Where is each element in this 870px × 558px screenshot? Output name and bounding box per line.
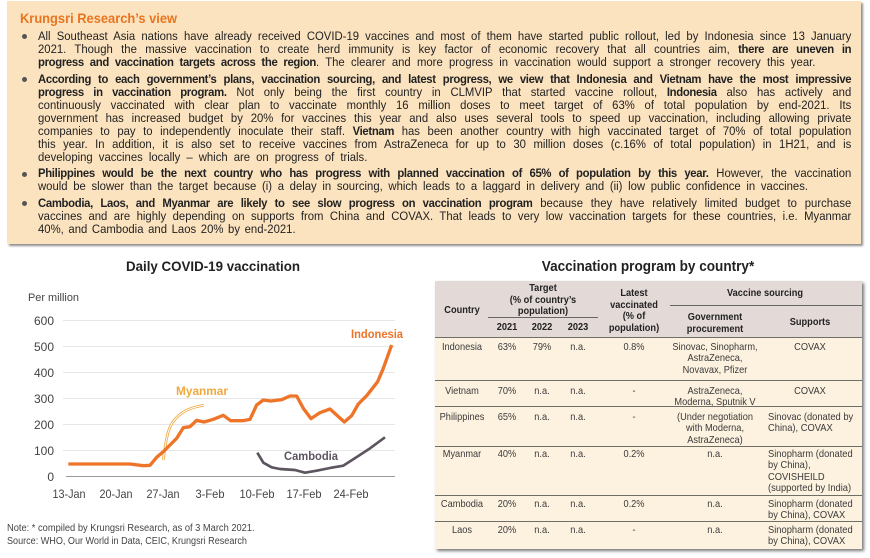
panel: Krungsri Research's view: [7, 1, 861, 244]
text block: bullet 2: government has increased budget by 20% for vaccines this year and also uses several tools to speed up vaccination, including allowing private: [38, 111, 851, 125]
line: Indonesia: [68, 345, 392, 466]
table header: population): [609, 322, 659, 334]
table header: (% of country’s: [510, 294, 576, 306]
row: Vietnam: AstraZeneca,: [688, 385, 742, 397]
chart title: Daily COVID-19 vaccination: [126, 258, 300, 274]
text block: bullet 3: [22, 166, 851, 193]
row: Cambodia: n.a.: [570, 498, 586, 510]
x axis labels: 24-Feb: [334, 487, 369, 501]
row: Philippines: n.a.: [534, 411, 550, 423]
row: Laos: Laos: [452, 524, 472, 536]
row: Philippines: China), COVAX: [768, 422, 833, 434]
y axis labels: 400: [34, 366, 54, 380]
x axis labels: 3-Feb: [196, 487, 225, 501]
row: Cambodia: by China), COVAX: [768, 509, 845, 521]
row: Cambodia: n.a.: [534, 498, 550, 510]
table header: (% of: [623, 310, 645, 322]
row: Cambodia: [435, 496, 862, 522]
table header: 2023: [568, 321, 588, 333]
row: Vietnam: n.a.: [534, 385, 550, 397]
row: Myanmar: 0.2%: [623, 448, 645, 460]
table header: vaccinated: [610, 299, 658, 311]
row: Myanmar: 40%: [498, 448, 516, 460]
y axis labels: 200: [34, 418, 54, 432]
row: Indonesia: [435, 338, 862, 381]
row: Vietnam: Moderna, Sputnik V: [674, 396, 756, 408]
row: Philippines: Philippines: [440, 411, 484, 423]
y axis labels: 300: [34, 392, 54, 406]
row: Indonesia: 79%: [533, 341, 551, 353]
x axis labels: 13-Jan: [52, 487, 86, 501]
x axis labels: 17-Feb: [286, 487, 322, 501]
text block: bullet 2: companies to pay to independently inoculate their staff. Vietnam has been another country with high vaccinated target of 70% of total population: [38, 124, 851, 138]
x axis labels: [52, 487, 369, 501]
heading: Krungsri Research's view: Krungsri Research’s view: [20, 10, 177, 26]
text block: bullet 2: continuously vaccinated with clear plan to vaccinate monthly 16 million doses to meet target of 63% of total population by end-2021. Its: [38, 98, 851, 112]
table: vaccination program by country: [435, 281, 862, 549]
row: Myanmar: Myanmar: [443, 448, 481, 460]
row: Vietnam: -: [632, 385, 636, 397]
row: Philippines: AstraZeneca): [687, 434, 743, 446]
row: Vietnam: 70%: [498, 385, 516, 397]
row: Myanmar: COVISHEILD: [768, 471, 825, 483]
y axis labels: 600: [34, 314, 54, 328]
row: Philippines: 65%: [498, 411, 516, 423]
row: Myanmar: [435, 447, 862, 496]
text block: bullet 3: would be slower than the target because (i) a delay in sourcing, which leads to a laggard in delivery and (ii) low public confidence in vaccines.: [38, 179, 808, 193]
row: Vietnam: [435, 381, 862, 407]
row: Myanmar: n.a.: [707, 448, 723, 460]
row: Cambodia: 20%: [498, 498, 516, 510]
table header: Latest: [620, 287, 648, 299]
table title: Vaccination program by country*: [542, 259, 754, 275]
text block: bullet 4: vaccines and are highly depending on supports from China and COVAX. That leads to very low vaccination targets for these countries, i.e. Myanmar: [38, 209, 851, 223]
chart: Daily COVID-19 vaccination: [28, 258, 403, 501]
row: Indonesia: 0.8%: [623, 341, 645, 353]
row: Laos: n.a.: [570, 524, 586, 536]
text block: bullet 1: All Southeast Asia nations have already received COVID-19 vaccines and most of them have started public rollout, led by Indonesia since 13 January: [38, 29, 851, 43]
notes and source: Source: WHO, Our World in Data, CEIC, Krungsri Research: [7, 536, 247, 547]
row: Indonesia: Indonesia: [442, 341, 482, 353]
text block: bullet 1: progress and vaccination targets across the region. The clearer and more progress in vaccination would support a stronger recovery this year.: [38, 55, 815, 69]
row: Philippines: n.a.: [570, 411, 586, 423]
table header: 2022: [532, 321, 552, 333]
label: Indonesia: Indonesia: [351, 327, 403, 341]
table header: Country: [444, 304, 480, 316]
label: Cambodia: Cambodia: [284, 449, 338, 463]
row: Laos: by China), COVAX: [768, 535, 845, 547]
row: Vietnam: COVAX: [794, 385, 826, 397]
y axis labels: 100: [34, 444, 54, 458]
text block: bullet 4: 40%, and Cambodia and Laos 20% by end-2021.: [38, 222, 296, 236]
row: Myanmar: n.a.: [534, 448, 550, 460]
table header: Supports: [790, 316, 830, 328]
row: Indonesia: n.a.: [570, 341, 586, 353]
text block: bullet 4: Cambodia, Laos, and Myanmar are likely to see slow progress on vaccination program because they have relatively limited budget to purchase: [38, 196, 851, 210]
notes and source: [7, 523, 255, 547]
row: Philippines: -: [632, 411, 636, 423]
text block: bullet 2: this year. In addition, it is also set to receive vaccines from AstraZeneca for up to 30 million doses (c.16% of total population) in 1H21, and is: [38, 137, 851, 151]
notes and source: Note: * compiled by Krungsri Research, as of 3 March 2021.: [7, 523, 255, 534]
row: Laos: [435, 522, 862, 549]
table header: population): [518, 305, 568, 317]
line: Cambodia: [257, 437, 385, 473]
text block: bullet 3: Philippines would be the next country who has progress with planned vaccination of 65% of population by this year. However, the vaccination: [38, 166, 851, 180]
x axis labels: 27-Jan: [146, 487, 180, 501]
row: Myanmar: by China),: [768, 459, 811, 471]
x axis labels: 20-Jan: [100, 487, 132, 501]
row: Myanmar: (supported by India): [768, 482, 851, 494]
x axis labels: 10-Feb: [240, 487, 275, 501]
row: Laos: Sinopharm (donated: [768, 524, 853, 536]
line: Myanmar: [163, 405, 204, 460]
text block: bullet 2: [22, 72, 852, 164]
table header: 2021: [497, 321, 517, 333]
text block: bullet 2: According to each government’s plans, vaccination sourcing, and latest progress, we view that Indonesia and Vietnam have the most impressive: [38, 72, 851, 86]
row: Laos: n.a.: [534, 524, 550, 536]
row: Cambodia: 0.2%: [623, 498, 645, 510]
row: Philippines: with Moderna,: [686, 422, 744, 434]
table header: Government: [688, 311, 742, 323]
row: Indonesia: COVAX: [794, 341, 826, 353]
row: Philippines: [435, 407, 862, 447]
row: Laos: -: [632, 524, 636, 536]
text block: bullet 4: [22, 196, 852, 236]
text block: bullet 1: [22, 29, 852, 69]
row: Laos: 20%: [498, 524, 516, 536]
row: Vietnam: Vietnam: [445, 385, 479, 397]
row: Indonesia: Sinovac, Sinopharm,: [672, 341, 758, 353]
text block: bullet 2: progress in vaccination program. Not only being the first country in CLMVIP that started vaccine rollout, Indonesia also has actively and: [38, 85, 851, 99]
row: Indonesia: 63%: [498, 341, 516, 353]
label: Myanmar: Myanmar: [176, 384, 228, 398]
row: Myanmar: Sinopharm (donated: [768, 448, 853, 460]
row: Philippines: Sinovac (donated by: [768, 411, 853, 423]
table header: Target: [529, 282, 557, 294]
row: Indonesia: Novavax, Pfizer: [683, 364, 747, 376]
axis unit label: Per million: [28, 292, 79, 304]
table header: procurement: [687, 323, 743, 335]
table header: Vaccine sourcing: [727, 287, 803, 299]
row: Vietnam: n.a.: [570, 385, 586, 397]
text block: bullet 2: developing vaccines locally – which are on progress of trials.: [38, 150, 367, 164]
row: Indonesia: AstraZeneca,: [688, 352, 742, 364]
y axis labels: 0: [47, 470, 54, 484]
row: Cambodia: Cambodia: [441, 498, 483, 510]
table header: [435, 281, 862, 338]
row: Philippines: (Under negotiation: [677, 411, 753, 423]
row: Laos: n.a.: [707, 524, 723, 536]
y axis labels: [34, 314, 54, 484]
row: Cambodia: Sinopharm (donated: [768, 498, 853, 510]
text block: bullet 1: 2021. Though the massive vaccination to create herd immunity is key factor of economic recovery that all countries aim, there are uneven in: [38, 42, 851, 56]
row: Myanmar: n.a.: [570, 448, 586, 460]
row: Cambodia: n.a.: [707, 498, 723, 510]
y axis labels: 500: [34, 340, 54, 354]
